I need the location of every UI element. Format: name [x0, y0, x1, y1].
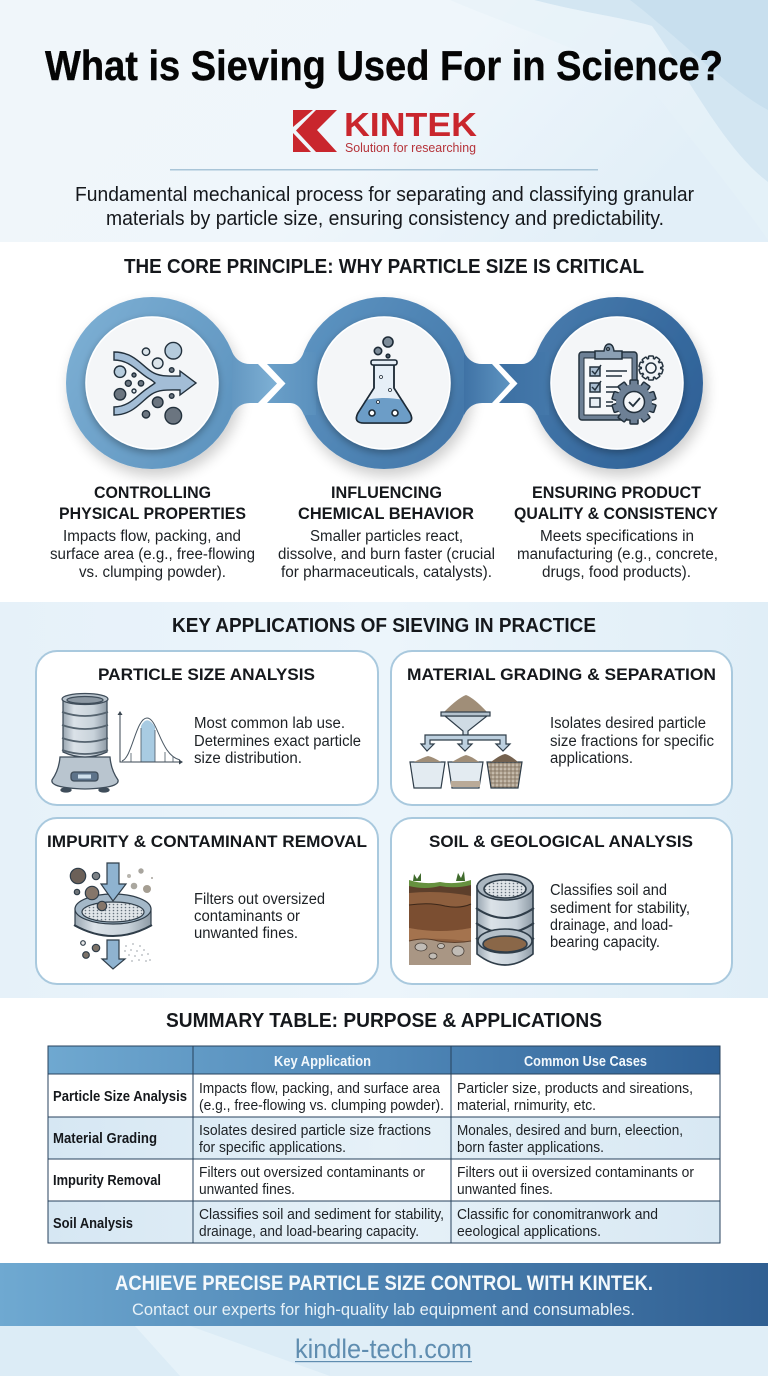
background: header band	[0, 0, 768, 242]
row: soil analysis: eeological applications.	[457, 1224, 601, 1240]
text column: controlling physical properties	[50, 483, 255, 581]
tagline: Solution for researching	[345, 140, 476, 155]
table: Common Use Cases	[524, 1053, 647, 1070]
footer	[0, 1326, 768, 1376]
card: soil and geological analysis: drainage, and load-	[550, 917, 673, 934]
card: material grading and separation: applications.	[550, 750, 633, 767]
card: soil and geological analysis: sediment for stability,	[550, 900, 690, 917]
panel: key applications	[0, 602, 768, 998]
card: material grading and separation: MATERIAL GRADING & SEPARATION	[407, 665, 716, 684]
text column: influencing chemical behavior: dissolve, and burn faster (crucial	[278, 546, 495, 563]
row: material grading: born faster applications.	[457, 1140, 604, 1156]
card: soil and geological analysis: Classifies soil and	[550, 882, 667, 899]
text column: ensuring product quality: Meets specifications in	[540, 528, 694, 545]
card: soil and geological analysis	[391, 818, 732, 984]
text column: ensuring product quality: manufacturing (e.g., concrete,	[517, 546, 718, 563]
row: soil analysis: Classific for conomitranwork and	[457, 1207, 658, 1223]
wordmark: KINTEK	[344, 106, 477, 143]
row: material grading: Monales, desired and burn, eleection,	[457, 1123, 683, 1139]
card: particle size analysis	[36, 651, 378, 805]
card: impurity and contaminant removal: IMPURITY & CONTAMINANT REMOVAL	[47, 832, 367, 851]
icon: soil profile	[409, 871, 471, 965]
small gear	[639, 356, 663, 380]
heading: core principle: THE CORE PRINCIPLE: WHY PARTICLE SIZE IS CRITICAL	[124, 256, 644, 278]
row: impurity removal	[53, 1165, 694, 1198]
row: particle size analysis: (e.g., free-flowing vs. clumping powder).	[199, 1098, 444, 1114]
card: material grading and separation: size fractions for specific	[550, 733, 714, 750]
row: particle size analysis: Impacts flow, packing, and surface area	[199, 1081, 441, 1097]
row: particle size analysis: Particle Size Analysis	[53, 1089, 187, 1105]
card: material grading and separation: Isolates desired particle	[550, 715, 706, 732]
row: material grading: for specific applications.	[199, 1140, 346, 1156]
card: impurity and contaminant removal: Filters out oversized	[194, 891, 325, 908]
card: material grading and separation	[391, 651, 732, 805]
row: impurity removal: unwanted fines.	[199, 1182, 295, 1198]
text column: influencing chemical behavior	[278, 483, 495, 581]
icon: merging arrows and particles	[114, 342, 196, 424]
text column: ensuring product quality: ENSURING PRODUCT	[532, 483, 702, 502]
icon: sieve with arrows and particles	[70, 863, 153, 969]
chart: bell curve	[118, 711, 183, 764]
circle step 2	[267, 297, 510, 469]
row: soil analysis	[53, 1207, 658, 1240]
text column: controlling physical properties: PHYSICAL PROPERTIES	[59, 504, 246, 523]
icon: flask	[356, 337, 412, 423]
text column: influencing chemical behavior: for pharmaceuticals, catalysts).	[281, 564, 492, 581]
panel: summary table	[0, 998, 768, 1263]
call-to-action banner: ACHIEVE PRECISE PARTICLE SIZE CONTROL WITH KINTEK.	[115, 1272, 653, 1295]
row: particle size analysis: material, rnimurity, etc.	[457, 1098, 596, 1114]
row: impurity removal: Impurity Removal	[53, 1173, 161, 1189]
card: impurity and contaminant removal	[36, 818, 378, 984]
text column: influencing chemical behavior: Smaller particles react,	[310, 528, 463, 545]
panel: core principle	[0, 242, 768, 602]
row: impurity removal: Filters out oversized contaminants or	[199, 1165, 425, 1181]
icon: sieve stack	[476, 874, 534, 965]
text column: influencing chemical behavior: CHEMICAL BEHAVIOR	[298, 504, 474, 523]
card: particle size analysis: PARTICLE SIZE ANALYSIS	[98, 665, 315, 684]
text column: ensuring product quality: QUALITY & CONSISTENCY	[514, 504, 719, 523]
table	[48, 1046, 720, 1243]
heading: key applications: KEY APPLICATIONS OF SIEVING IN PRACTICE	[172, 615, 596, 637]
row: material grading	[53, 1123, 683, 1156]
row: impurity removal: unwanted fines.	[457, 1182, 553, 1198]
row: material grading: Material Grading	[53, 1131, 157, 1147]
icon: K mark	[293, 110, 337, 152]
row: soil analysis: Soil Analysis	[53, 1216, 133, 1232]
subtitle: Fundamental mechanical process for separating and classifying granular	[75, 183, 694, 206]
text column: controlling physical properties: vs. clumping powder).	[79, 564, 226, 581]
table: Key Application	[274, 1053, 371, 1070]
card: particle size analysis: Most common lab use.	[194, 715, 345, 732]
text column: influencing chemical behavior: INFLUENCING	[331, 483, 442, 502]
text column: ensuring product quality	[514, 483, 719, 581]
call-to-action banner	[0, 1263, 768, 1326]
circle step 3	[499, 297, 703, 469]
row: soil analysis: Classifies soil and sediment for stability,	[199, 1207, 444, 1223]
link: website: kindle-tech.com	[295, 1334, 472, 1364]
call-to-action banner: Contact our experts for high-quality lab equipment and consumables.	[132, 1300, 635, 1319]
card: soil and geological analysis: SOIL & GEOLOGICAL ANALYSIS	[429, 832, 693, 851]
text column: ensuring product quality: drugs, food products).	[542, 564, 691, 581]
row: impurity removal: Filters out ii oversized contaminants or	[457, 1165, 694, 1181]
icon: funnel with three cups	[410, 695, 522, 788]
card: soil and geological analysis: bearing capacity.	[550, 934, 660, 951]
row: particle size analysis: Particler size, products and sireations,	[457, 1081, 693, 1097]
logo: KINTEK	[293, 106, 477, 155]
big gear	[612, 380, 656, 424]
row: soil analysis: drainage, and load-bearing capacity.	[199, 1224, 419, 1240]
row: particle size analysis	[53, 1081, 693, 1114]
subtitle	[75, 183, 694, 230]
row: material grading: Isolates desired particle size fractions	[199, 1123, 431, 1139]
icon: sieve shaker	[52, 694, 118, 792]
card: impurity and contaminant removal: unwanted fines.	[194, 925, 298, 942]
card: particle size analysis: Determines exact particle	[194, 733, 361, 750]
circle step 1	[66, 297, 277, 469]
icon: clipboard and gears	[579, 344, 663, 424]
card: impurity and contaminant removal: contaminants or	[194, 908, 300, 925]
heading: summary table: SUMMARY TABLE: PURPOSE & APPLICATIONS	[166, 1010, 602, 1032]
text column: controlling physical properties: CONTROLLING	[94, 483, 211, 502]
subtitle: materials by particle size, ensuring consistency and predictability.	[106, 207, 664, 230]
text column: controlling physical properties: surface area (e.g., free-flowing	[50, 546, 255, 563]
card: particle size analysis: size distribution.	[194, 750, 302, 767]
text column: controlling physical properties: Impacts flow, packing, and	[63, 528, 241, 545]
